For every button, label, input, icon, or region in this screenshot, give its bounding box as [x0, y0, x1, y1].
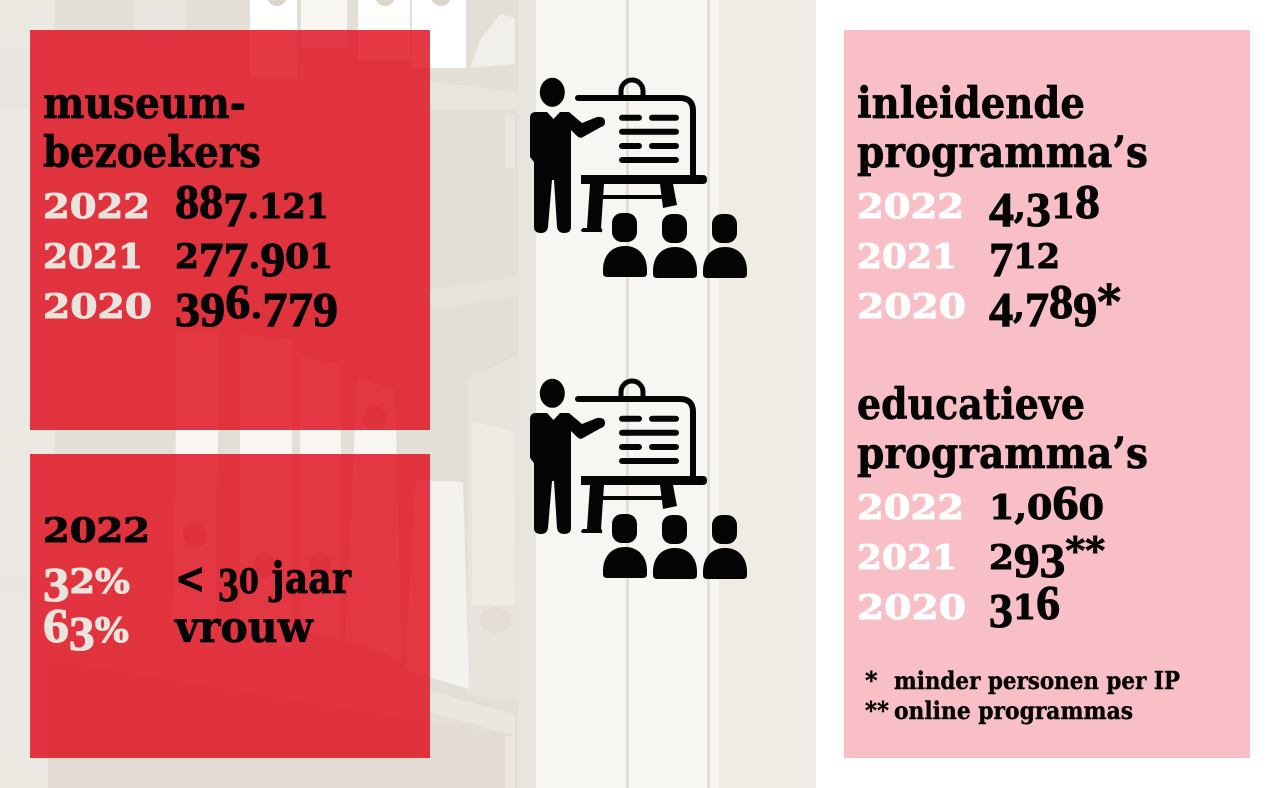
- heading: museumbezoekers: museum-: [43, 79, 246, 129]
- educational programme numbers: 2022: [857, 488, 964, 528]
- footnotes: online programmas: [894, 696, 1133, 725]
- panel: museum visitors: [30, 30, 430, 430]
- visitor numbers per year: 396.779: [175, 274, 338, 337]
- panel: programmes: [844, 30, 1250, 758]
- heading: inleidende programma's: inleidende: [857, 79, 1085, 129]
- educational programme numbers: 316: [989, 575, 1060, 638]
- footnotes: [865, 666, 1180, 725]
- panel: visitor profile 2022: [30, 454, 430, 758]
- visitor numbers per year: 2021: [43, 237, 143, 277]
- heading: educatieve programma's: educatieve: [857, 380, 1085, 430]
- percentages: [43, 554, 352, 661]
- introductory programme numbers: 4,789*: [989, 274, 1121, 337]
- heading: educatieve programma's: [857, 380, 1148, 479]
- percentages: vrouw: [174, 603, 314, 653]
- introductory programme numbers: [857, 174, 1121, 337]
- percentages: 32%: [43, 557, 130, 612]
- introductory programme numbers: 712: [989, 232, 1060, 287]
- educational programme numbers: 2020: [857, 588, 966, 628]
- introductory programme numbers: 2020: [857, 287, 966, 327]
- visitor numbers per year: 2022: [43, 187, 150, 227]
- heading: educatieve programma's: programma’s: [857, 429, 1148, 479]
- introductory programme numbers: 2021: [857, 237, 957, 277]
- icon: presenter with audience: [530, 78, 747, 278]
- introductory programme numbers: 4,318: [989, 174, 1100, 237]
- educational programme numbers: 293**: [989, 530, 1105, 588]
- footnotes: **: [865, 696, 889, 725]
- percentages: 63%: [43, 598, 129, 661]
- heading: 2022: 2022: [43, 511, 150, 551]
- visitor numbers per year: 887.121: [175, 174, 329, 237]
- heading: museumbezoekers: bezoekers: [43, 128, 261, 178]
- educational programme numbers: 2021: [857, 538, 957, 578]
- visitor numbers per year: [43, 174, 338, 337]
- footnotes: minder personen per IP: [894, 666, 1180, 695]
- introductory programme numbers: 2022: [857, 187, 964, 227]
- educational programme numbers: 1,060: [989, 475, 1104, 530]
- heading: inleidende programma's: programma’s: [857, 128, 1148, 178]
- heading: inleidende programma's: [857, 79, 1148, 178]
- footnotes: *: [865, 666, 878, 695]
- icon: presenter with audience (second): [530, 379, 747, 579]
- percentages: < 30 jaar: [175, 554, 352, 612]
- heading: museumbezoekers: [43, 79, 261, 178]
- educational programme numbers: [857, 475, 1105, 638]
- visitor numbers per year: 277.901: [175, 232, 333, 287]
- visitor numbers per year: 2020: [43, 287, 152, 327]
